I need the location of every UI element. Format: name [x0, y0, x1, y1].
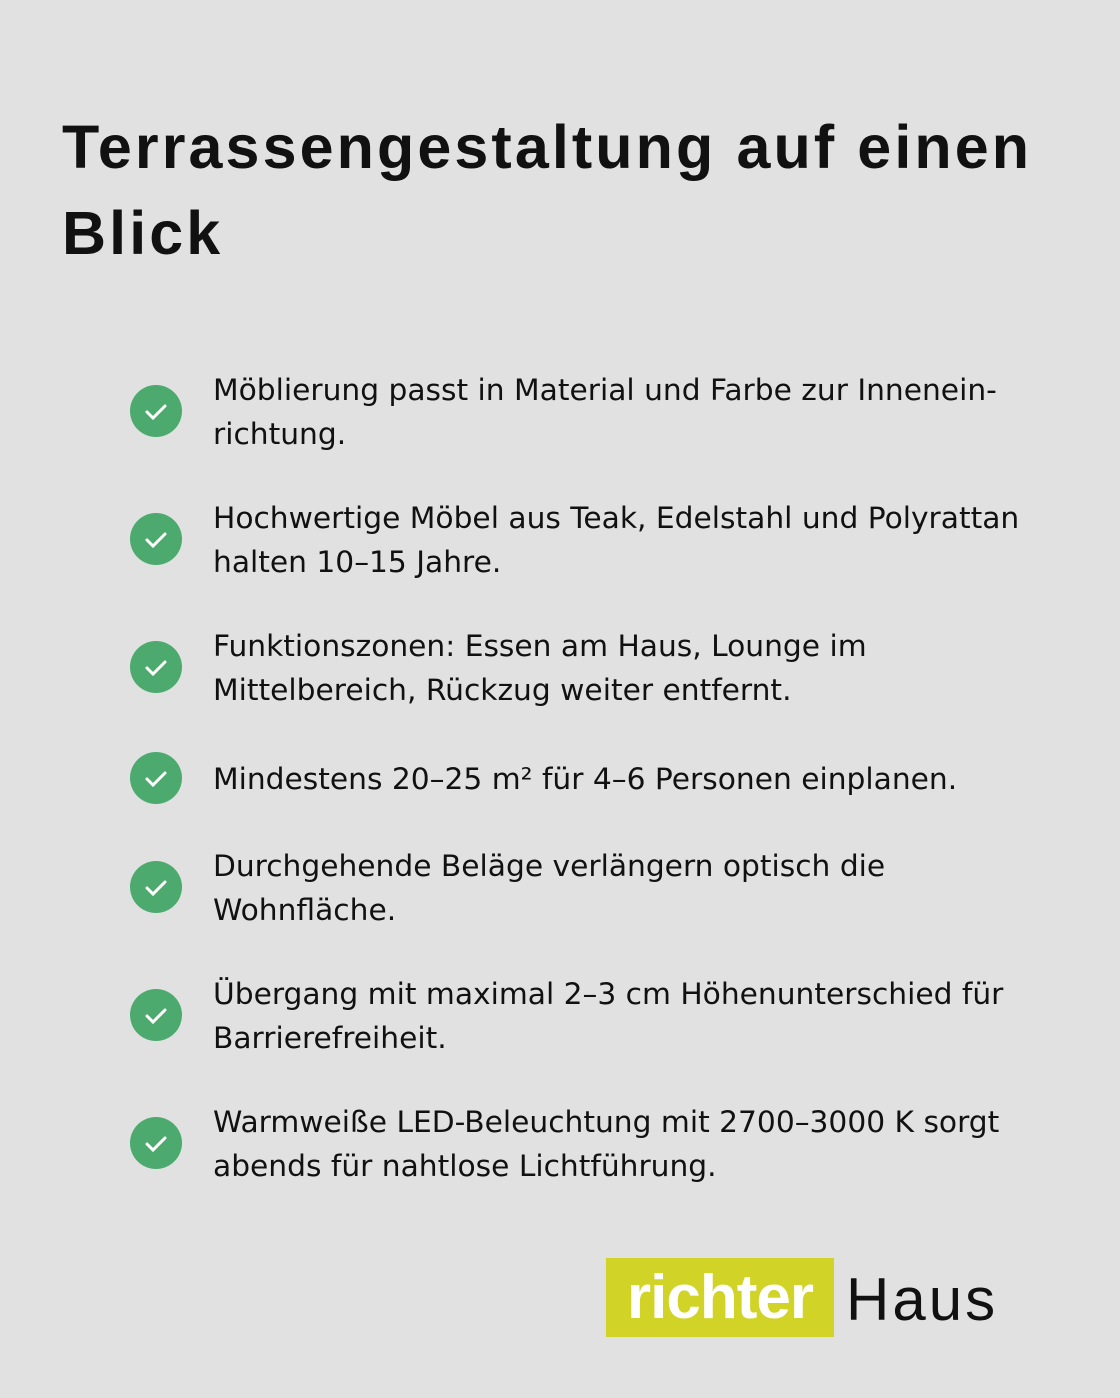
item 5: Wohnfläche.: [213, 893, 396, 928]
title: Blick: [62, 199, 223, 267]
item 7: Warmweiße LED-Beleuchtung mit 2700–3000 K sorgt: [213, 1105, 999, 1140]
item 4: [130, 752, 957, 804]
item 7: [130, 1105, 999, 1184]
item 3: Mittelbereich, Rückzug weiter entfernt.: [213, 673, 792, 708]
item 6: [130, 977, 1004, 1056]
item 1: Möblierung passt in Material und Farbe zur Innenein-: [213, 373, 997, 408]
item 3: Funktionszonen: Essen am Haus, Lounge im: [213, 629, 867, 664]
title: [62, 113, 1032, 267]
item 1: richtung.: [213, 417, 346, 452]
item 6: Übergang mit maximal 2–3 cm Höhenunterschied für: [213, 977, 1003, 1012]
logo: richter: [627, 1263, 813, 1332]
item 7: abends für nahtlose Lichtführung.: [213, 1149, 717, 1184]
logo: Haus: [846, 1266, 998, 1333]
item 5: [130, 849, 885, 928]
item 5: Durchgehende Beläge verlängern optisch die: [213, 849, 885, 884]
item 2: halten 10–15 Jahre.: [213, 545, 501, 580]
logo: [606, 1258, 998, 1337]
item 3: [130, 629, 867, 708]
title: Terrassengestaltung auf einen: [62, 113, 1032, 181]
item 6: Barrierefreiheit.: [213, 1021, 447, 1056]
item 2: [130, 501, 1019, 580]
item 4: Mindestens 20–25 m² für 4–6 Personen einplanen.: [213, 762, 957, 797]
item 2: Hochwertige Möbel aus Teak, Edelstahl und Polyrattan: [213, 501, 1019, 536]
item 1: [130, 373, 997, 452]
